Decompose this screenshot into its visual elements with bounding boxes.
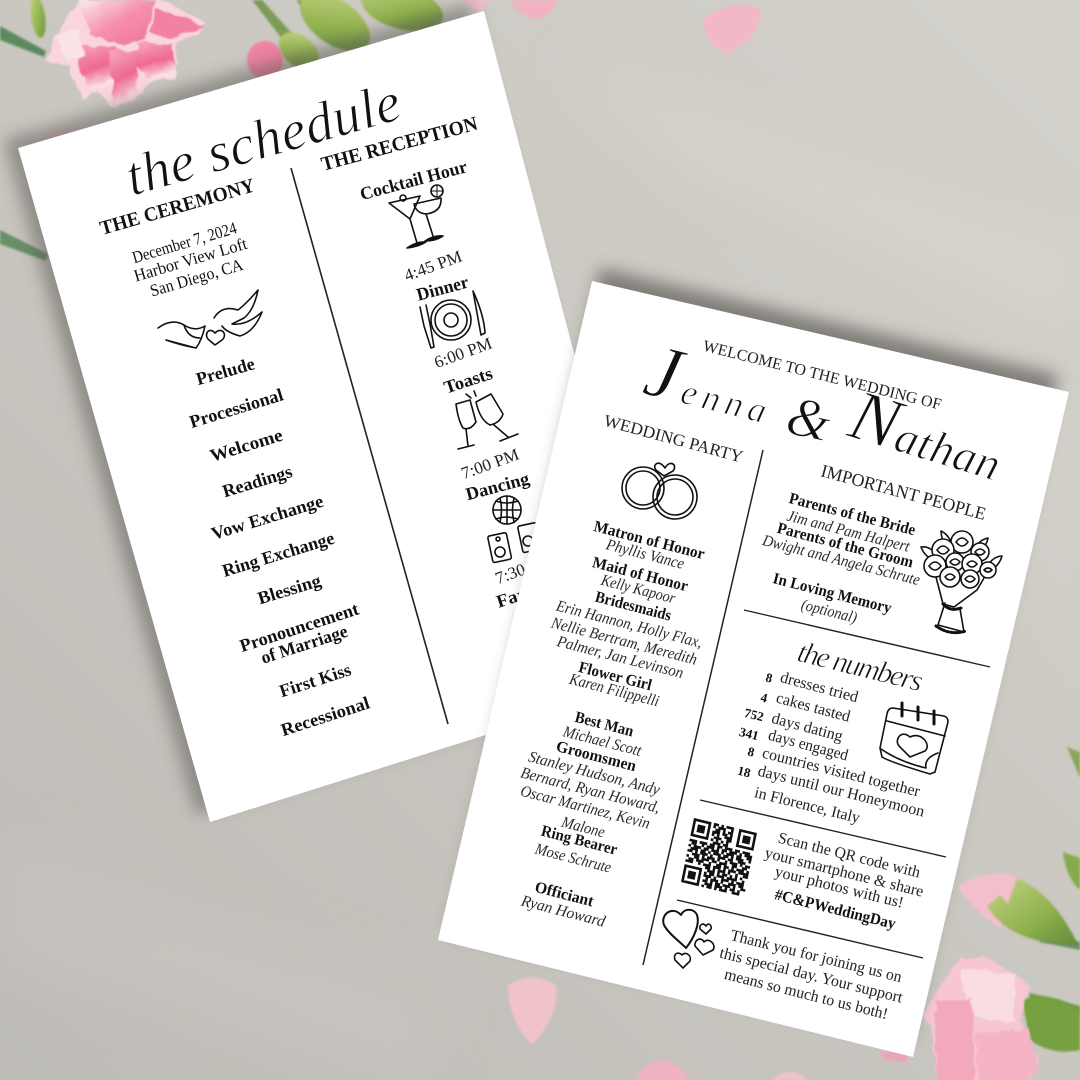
ceremony order list: Vow Exchange bbox=[209, 491, 326, 544]
time: 7:00 PM: 7:00 PM bbox=[459, 445, 522, 483]
icon: calendar with heart bbox=[880, 703, 948, 774]
wedding numbers list: 18 bbox=[736, 763, 753, 781]
wedding numbers list: days engaged bbox=[766, 727, 850, 764]
important people list bbox=[760, 490, 922, 627]
ceremony details bbox=[130, 218, 249, 300]
wedding party list: Ryan Howard bbox=[518, 892, 608, 931]
wedding party list: Officiant bbox=[533, 879, 596, 911]
wedding numbers list: 341 bbox=[738, 724, 760, 743]
wedding numbers list: 4 bbox=[759, 690, 770, 706]
wedding party list: Groomsmen bbox=[554, 738, 638, 775]
icon: champagne toast bbox=[456, 391, 518, 449]
important people list: In Loving Memory bbox=[771, 570, 893, 617]
shadow: welcome card bbox=[450, 268, 1058, 1040]
wedding party list: Maid of Honor bbox=[591, 554, 690, 595]
label: dinner: Dinner bbox=[414, 272, 471, 305]
icon: hearts bbox=[663, 910, 714, 968]
ceremony order list: Recessional bbox=[278, 693, 372, 740]
wedding party list: Karen Filippelli bbox=[567, 671, 661, 710]
wedding numbers list: 8 bbox=[764, 670, 775, 686]
ceremony order list: Readings bbox=[220, 461, 295, 501]
divider under important people bbox=[744, 610, 990, 667]
script names: Jenna and Nathan bbox=[637, 328, 1013, 496]
wedding numbers list: 8 bbox=[746, 744, 757, 760]
icon: plate and cutlery bbox=[420, 291, 485, 348]
icon: disco ball and speakers bbox=[488, 496, 542, 563]
QR instructions: your photos with us! bbox=[773, 863, 905, 912]
QR instructions: Scan the QR code with bbox=[776, 830, 922, 882]
label: farewell: Farewell bbox=[494, 571, 567, 612]
QR instructions bbox=[763, 830, 925, 933]
ceremony order list: Processional bbox=[187, 385, 286, 432]
subtitle: welcome line: WELCOME TO THE WEDDING OF bbox=[701, 338, 943, 414]
wedding party list bbox=[518, 518, 706, 931]
wedding party list: Nellie Bertram, Meredith bbox=[548, 614, 699, 669]
script heading: the schedule: the schedule bbox=[118, 71, 408, 208]
panel: schedule card bbox=[18, 11, 660, 822]
ceremony order list: Prelude bbox=[194, 353, 257, 389]
ceremony details: December 7, 2024 bbox=[130, 218, 239, 267]
ceremony order list: of Marriage bbox=[258, 621, 350, 668]
wedding numbers list: countries visited together bbox=[760, 745, 922, 801]
divider above QR bbox=[700, 800, 946, 857]
wedding numbers list: days until our Honeymoon bbox=[756, 763, 926, 821]
script heading: the numbers: the numbers bbox=[794, 635, 926, 698]
divider above thank you bbox=[677, 900, 923, 958]
important people list: Jim and Pam Halpert bbox=[785, 508, 912, 556]
wedding party list: Oscar Martinez, Kevin bbox=[519, 783, 652, 833]
icon: rose bouquet bbox=[921, 531, 1002, 633]
heading: wedding party: WEDDING PARTY bbox=[602, 411, 745, 466]
divider between columns bbox=[291, 168, 448, 724]
script names: Jenna and Nathan: Nathan bbox=[840, 374, 1013, 496]
wedding party list: Flower Girl bbox=[577, 659, 654, 694]
time: 7:30 PM: 7:30 PM bbox=[493, 550, 556, 588]
flowers: bottom right carnation and buds bbox=[924, 747, 1080, 1080]
time: 6:00 PM: 6:00 PM bbox=[432, 334, 495, 372]
ceremony order list: Blessing bbox=[255, 570, 323, 608]
heading: the ceremony: THE CEREMONY bbox=[97, 174, 258, 240]
wedding numbers list: in Florence, Italy bbox=[753, 784, 862, 827]
wedding party list: Erin Hannon, Holly Flax, bbox=[554, 597, 704, 652]
thank you message: this special day. Your support bbox=[718, 945, 905, 1007]
script names: Jenna and Nathan: & bbox=[781, 385, 837, 454]
important people list: Parents of the Bride bbox=[787, 490, 917, 539]
wedding numbers list: dresses tried bbox=[778, 669, 860, 706]
heading: the reception: THE RECEPTION bbox=[319, 113, 481, 176]
ceremony details: Harbor View Loft bbox=[132, 234, 249, 285]
wedding numbers list bbox=[736, 669, 926, 827]
icon: cocktail glasses bbox=[389, 185, 443, 248]
wedding numbers list: cakes tasted bbox=[774, 690, 852, 726]
script names: Jenna and Nathan: Jenna bbox=[637, 328, 779, 440]
reception schedule bbox=[358, 156, 567, 612]
ceremony order list: First Kiss bbox=[277, 659, 353, 701]
ceremony order list bbox=[187, 353, 372, 740]
wedding party list: Ring Bearer bbox=[539, 823, 619, 859]
thank you message bbox=[718, 927, 905, 1023]
QR instructions: your smartphone & share bbox=[763, 845, 925, 901]
shadow: schedule card bbox=[4, 3, 640, 814]
wedding party list: Mose Schrute bbox=[532, 840, 613, 877]
flowers: top left carnation and buds bbox=[0, 0, 448, 261]
QR instructions: #C&PWeddingDay bbox=[773, 886, 897, 933]
ceremony details: San Diego, CA bbox=[148, 255, 246, 300]
time: 4:45 PM: 4:45 PM bbox=[402, 247, 465, 285]
panel: welcome card bbox=[438, 281, 1069, 1057]
wedding party list: Best Man bbox=[573, 709, 635, 740]
wedding party list: Michael Scott bbox=[560, 723, 643, 760]
wedding party list: Phyllis Vance bbox=[603, 536, 686, 573]
ceremony order list: Pronouncement bbox=[237, 599, 361, 656]
wedding party list: Malone bbox=[559, 814, 607, 841]
label: cocktail hour: Cocktail Hour bbox=[358, 156, 469, 204]
important people list: (optional) bbox=[799, 596, 859, 627]
wedding party list: Matron of Honor bbox=[592, 518, 706, 563]
wedding party list: Kelly Kapoor bbox=[598, 572, 678, 608]
wedding party list: Bernard, Ryan Howard, bbox=[519, 765, 661, 817]
ceremony order list: Welcome bbox=[207, 425, 285, 466]
heading: important people: IMPORTANT PEOPLE bbox=[819, 461, 988, 524]
important people list: Dwight and Angela Schrute bbox=[760, 532, 922, 589]
wedding numbers list: 752 bbox=[743, 705, 765, 724]
label: dancing: Dancing bbox=[463, 468, 531, 504]
thank you message: Thank you for joining us on bbox=[729, 927, 904, 986]
wedding party list: Bridesmaids bbox=[593, 589, 673, 625]
wedding party list: Stanley Hudson, Andy bbox=[527, 749, 662, 799]
ceremony order list: Ring Exchange bbox=[220, 528, 337, 581]
icon: wedding rings bbox=[622, 463, 697, 519]
important people list: Parents of the Groom bbox=[775, 520, 916, 572]
wedding numbers list: days dating bbox=[770, 710, 845, 745]
vertical divider bbox=[643, 450, 763, 965]
thank you message: means so much to us both! bbox=[723, 966, 890, 1023]
icon: doves with hearts bbox=[158, 290, 262, 348]
wedding party list: Palmer, Jan Levinson bbox=[554, 633, 685, 682]
label: toasts: Toasts bbox=[441, 363, 495, 398]
QR code bbox=[681, 819, 757, 896]
